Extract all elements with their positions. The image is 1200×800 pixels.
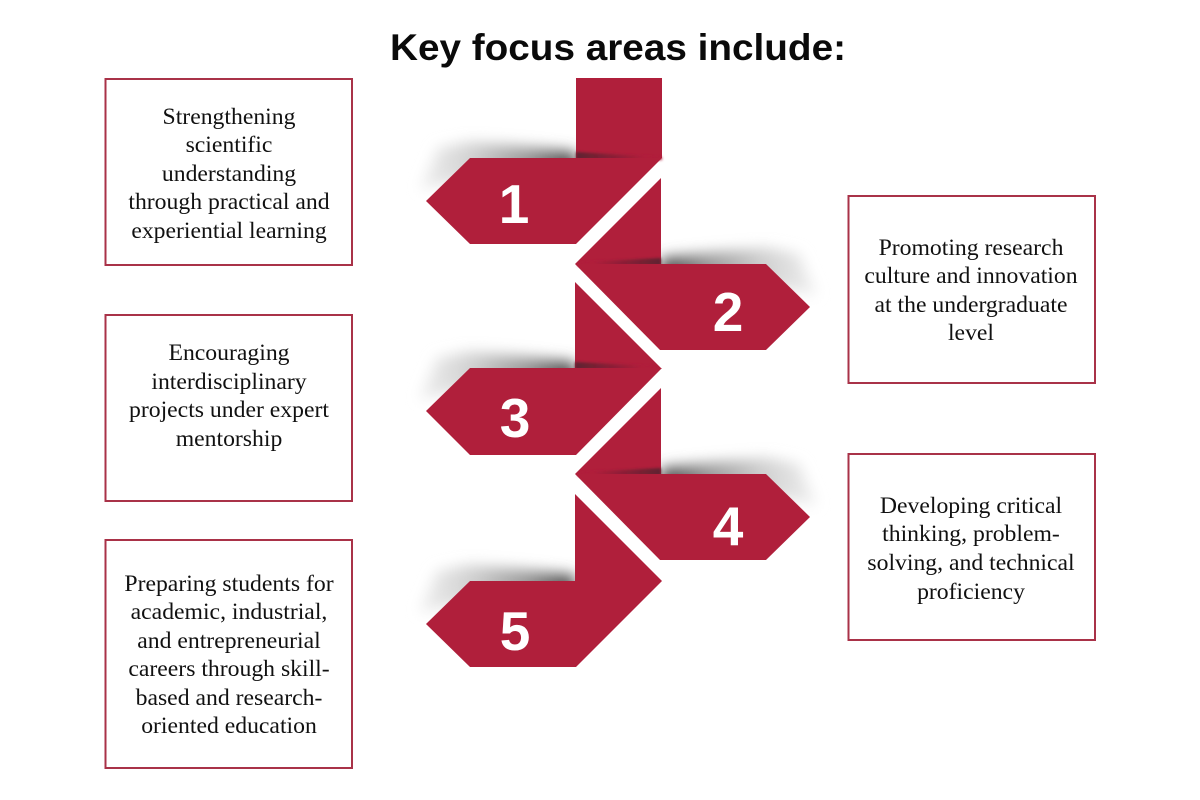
panel: item 5 text box: [106, 540, 352, 768]
number 5: 5: [500, 600, 530, 662]
shadow: arrow 1: [420, 142, 576, 190]
panel: item 5 text box: Preparing students for: [124, 571, 334, 597]
shadow: arrow 2: [661, 248, 817, 296]
arrow 5: [426, 581, 662, 667]
panel: item 4 text box: solving, and technical: [867, 550, 1075, 576]
arrow 3: [426, 368, 662, 455]
number 3: 3: [500, 387, 530, 449]
panel: item 2 text box: level: [948, 320, 994, 346]
panel: item 2 text box: [848, 196, 1095, 383]
number 2: 2: [713, 281, 743, 343]
panel: item 1 text box: understanding: [162, 161, 296, 187]
arrow 4: [575, 474, 810, 560]
title: Key focus areas include:: [390, 27, 846, 68]
panel: item 4 text box: Developing critical: [880, 493, 1063, 519]
fold shade 3: [575, 362, 658, 370]
shadow: arrow 4: [661, 458, 817, 506]
number 4: 4: [713, 495, 744, 557]
number 1: 1: [499, 173, 529, 235]
panel: item 3 text box: interdisciplinary: [151, 369, 307, 395]
panel: item 4 text box: proficiency: [917, 579, 1025, 605]
fold triangle 3: [575, 282, 661, 368]
fold triangle 2: [575, 178, 661, 264]
panel: item 1 text box: scientific: [186, 132, 272, 158]
fold shade 2: [577, 258, 661, 266]
panel: item 4 text box: [848, 454, 1095, 640]
panel: item 3 text box: projects under expert: [129, 397, 329, 423]
fold triangle 4: [575, 388, 661, 474]
panel: item 2 text box: at the undergraduate: [875, 292, 1067, 318]
panel: item 5 text box: based and research-: [136, 685, 322, 711]
panel: item 5 text box: careers through skill-: [128, 656, 330, 682]
fold shade 1: [576, 152, 662, 160]
panel: item 5 text box: oriented education: [141, 713, 317, 739]
panel: item 3 text box: Encouraging: [168, 340, 290, 366]
arrow 1: [426, 158, 662, 244]
panel: item 3 text box: [106, 315, 352, 501]
panel: item 3 text box: mentorship: [176, 426, 282, 452]
ribbon top stem: [576, 78, 662, 158]
panel: item 4 text box: thinking, problem-: [882, 521, 1060, 547]
panel: item 1 text box: [106, 79, 352, 265]
panel: item 5 text box: and entrepreneurial: [137, 628, 321, 654]
panel: item 1 text box: through practical and: [128, 189, 330, 215]
folded ribbon diagram: [419, 78, 817, 667]
panel: item 1 text box: Strengthening: [163, 104, 296, 130]
shadow: arrow 5: [419, 565, 575, 613]
panel: item 5 text box: academic, industrial,: [131, 599, 327, 625]
fold triangle 5: [575, 494, 662, 581]
fold shade 4: [577, 468, 661, 476]
shadow: arrow 3: [419, 352, 575, 400]
panel: item 2 text box: culture and innovation: [864, 263, 1078, 289]
panel: item 2 text box: Promoting research: [879, 235, 1064, 261]
panel: item 1 text box: experiential learning: [131, 218, 327, 244]
arrow 2: [575, 264, 810, 350]
